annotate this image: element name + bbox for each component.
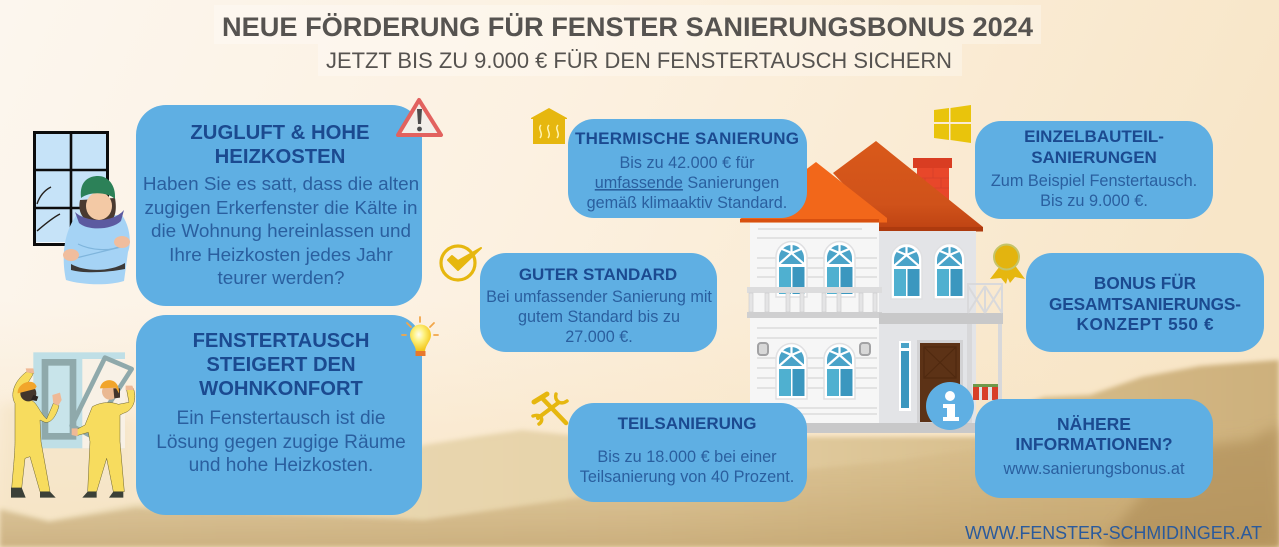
panel: Teilsanierung: Bis zu 18.000 € bei einer [597,448,777,466]
icon: tools [533,394,567,424]
subtitle: JETZT BIS ZU 9.000 € FÜR DEN FENSTERTAUSCH SICHERN [326,48,952,73]
panel: Einzelbauteil-Sanierungen [975,121,1213,219]
panel: Fenstertausch steigert den Wohnkonfort: Ein Fenstertausch ist die [176,408,386,429]
worker left [11,368,62,498]
panel: Nähere Informationen: NÄHERE [1057,414,1131,434]
illustration: person freezing at window [33,131,130,284]
panel: Bonus für Gesamtsanierungskonzept [1026,253,1264,352]
panel: Fenstertausch steigert den Wohnkonfort: und hohe Heizkosten. [189,455,373,476]
panel: Nähere Informationen [975,399,1213,498]
icon: info [926,382,974,430]
panel: Guter Standard: gutem Standard bis zu [518,308,680,326]
panel: Zugluft und hohe Heizkosten: HEIZKOSTEN [215,146,345,168]
panel: Teilsanierung: Teilsanierung von 40 Prozent. [580,468,794,486]
icon: heated house [531,108,567,144]
panel: Teilsanierung [568,403,807,502]
panel: Einzelbauteil-Sanierungen: EINZELBAUTEIL- [1024,127,1164,146]
panel: Thermische Sanierung: gemäß klimaaktiv Standard. [587,194,787,212]
panel: Thermische Sanierung: Bis zu 42.000 € für [620,154,755,172]
panel: Nähere Informationen: www.sanierungsbonus.at [1002,460,1185,478]
panel: Einzelbauteil-Sanierungen: Zum Beispiel Fenstertausch. [991,172,1197,190]
panel: Bonus für Gesamtsanierungskonzept: GESAMTSANIERUNGS- [1049,294,1241,314]
panel: Thermische Sanierung [568,119,807,218]
panel: Fenstertausch steigert den Wohnkonfort [136,315,422,515]
windows [776,242,965,399]
panel: Fenstertausch steigert den Wohnkonfort: STEIGERT DEN [206,354,356,376]
panel: Bonus für Gesamtsanierungskonzept: BONUS FÜR [1094,273,1197,293]
panel: Zugluft und hohe Heizkosten: Ihre Heizkosten jedes Jahr [169,245,393,266]
panel: Zugluft und hohe Heizkosten: ZUGLUFT & HOHE [190,122,370,144]
panel: Zugluft und hohe Heizkosten: teurer werden? [217,268,345,289]
panel: Einzelbauteil-Sanierungen: Bis zu 9.000 €. [1040,192,1148,210]
panel: Zugluft und hohe Heizkosten: zugigen Erkerfenster die Kälte in [144,198,418,219]
illustration: house [740,141,1003,433]
footer website: WWW.FENSTER-SCHMIDINGER.AT [965,522,1262,543]
title: NEUE FÖRDERUNG FÜR FENSTER SANIERUNGSBONUS 2024 [222,12,1033,42]
front roof [740,162,887,222]
panel: Teilsanierung: TEILSANIERUNG [618,414,756,433]
panel: Bonus für Gesamtsanierungskonzept: KONZEPT 550 € [1076,314,1214,334]
panel: Fenstertausch steigert den Wohnkonfort: FENSTERTAUSCH [193,330,369,352]
worker right [72,380,135,498]
panel: Thermische Sanierung: umfassende Sanierungen [595,174,779,192]
icon: light bulb [402,317,438,356]
panel: Thermische Sanierung: THERMISCHE SANIERUNG [575,129,799,148]
lamps [758,343,870,355]
door [917,340,963,423]
panel: Fenstertausch steigert den Wohnkonfort: WOHNKONFORT [199,378,364,400]
panel: Guter Standard: 27.000 €. [565,328,633,346]
panel: Guter Standard [480,253,717,352]
narrow window [899,341,911,411]
panel: Nähere Informationen: INFORMATIONEN? [1015,434,1173,454]
panel: Einzelbauteil-Sanierungen: SANIERUNGEN [1031,148,1157,167]
icon: award ribbon [990,244,1025,284]
panel: Zugluft und hohe Heizkosten [136,105,422,306]
icon: warning triangle [398,100,441,135]
icon: check mark [441,246,481,280]
icon: window [934,105,971,143]
illustration: workers installing window [11,352,135,498]
panel: Zugluft und hohe Heizkosten: die Wohnung hereinlassen und [151,221,411,242]
panel: Guter Standard: Bei umfassender Sanierung mit [486,288,712,306]
balcony [747,284,1003,423]
back roof and chimney [833,141,983,232]
panel: Fenstertausch steigert den Wohnkonfort: Lösung gegen zugige Räume [156,432,406,453]
walls [750,223,976,433]
panel: Zugluft und hohe Heizkosten: Haben Sie es satt, dass die alten [143,174,419,195]
title highlight strips [214,5,1041,76]
panel: Guter Standard: GUTER STANDARD [519,265,677,284]
